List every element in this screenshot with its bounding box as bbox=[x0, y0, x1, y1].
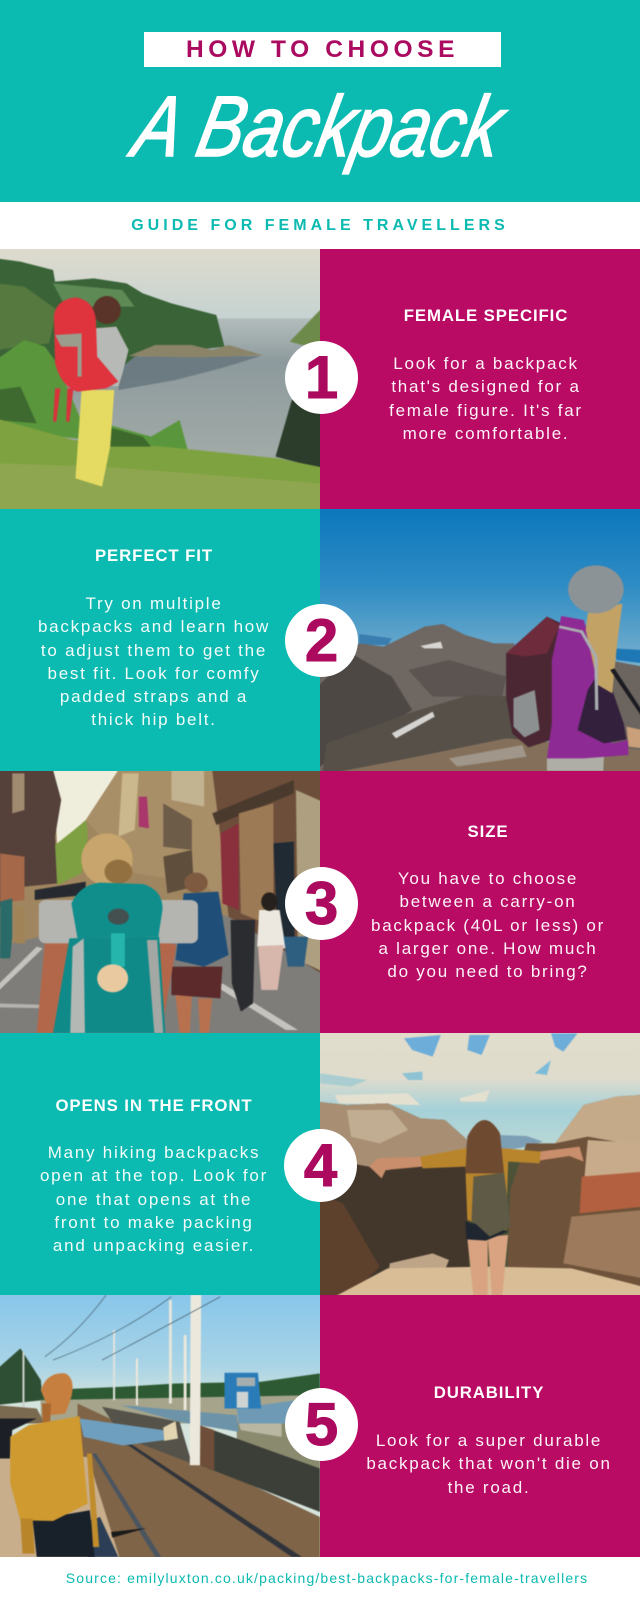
heading 4: OPENS IN THE FRONT bbox=[55, 1096, 253, 1115]
text 2: best fit. Look for comfy bbox=[47, 664, 260, 683]
text 3: between a carry-on bbox=[399, 892, 577, 911]
number badge 2: 2 bbox=[305, 607, 338, 674]
heading 2: PERFECT FIT bbox=[95, 546, 213, 565]
text 1: that's designed for a bbox=[391, 377, 581, 396]
text 2: backpacks and learn how bbox=[38, 617, 270, 636]
text 4: front to make packing bbox=[54, 1213, 254, 1232]
text 2 bbox=[38, 594, 270, 729]
subtitle bbox=[0, 202, 640, 249]
panel 5: durability bbox=[320, 1295, 640, 1557]
number badge 3: 3 bbox=[305, 870, 338, 937]
panel 4: opens in the front bbox=[0, 1033, 320, 1295]
text 1: female figure. It's far bbox=[389, 400, 583, 420]
text 2: padded straps and a bbox=[60, 687, 248, 706]
text 1 bbox=[389, 354, 583, 443]
photo 2: hiker with purple jacket and mountains bbox=[320, 509, 640, 771]
text 3 bbox=[371, 869, 605, 981]
heading 5: DURABILITY bbox=[434, 1383, 544, 1402]
text 1: Look for a backpack bbox=[393, 354, 579, 373]
heading 3: SIZE bbox=[468, 822, 508, 841]
number badge 5 bbox=[285, 1388, 358, 1461]
number badge 1: 1 bbox=[305, 344, 338, 411]
photo 5: hitchhiker beside railway tracks bbox=[0, 1295, 320, 1557]
number badge 4: 4 bbox=[304, 1132, 337, 1199]
text 5: the road. bbox=[448, 1478, 530, 1496]
text 2: Try on multiple bbox=[85, 594, 223, 613]
source line: Source: emilyluxton.co.uk/packing/best-backpacks-for-female-travellers bbox=[66, 1570, 588, 1586]
text 1: more comfortable. bbox=[403, 424, 569, 443]
panel 2: perfect fit bbox=[0, 509, 320, 771]
text 3: backpack (40L or less) or bbox=[371, 916, 605, 934]
text 5: backpack that won't die on bbox=[366, 1454, 612, 1473]
text 3: You have to choose bbox=[398, 869, 578, 888]
text 4: and unpacking easier. bbox=[53, 1236, 255, 1255]
text 4: Many hiking backpacks bbox=[48, 1143, 260, 1162]
hitchhiker figure bbox=[10, 1373, 178, 1557]
text 2: to adjust them to get the bbox=[41, 640, 267, 660]
header band bbox=[0, 0, 640, 202]
number badge 1 bbox=[285, 341, 358, 414]
text 2: thick hip belt. bbox=[91, 710, 217, 729]
text 4: one that opens at the bbox=[56, 1190, 252, 1208]
woman figure bbox=[369, 1120, 584, 1297]
hiker figure bbox=[506, 565, 640, 771]
text 3: do you need to bring? bbox=[387, 962, 589, 981]
panel 3: size bbox=[320, 771, 640, 1033]
number badge 4 bbox=[284, 1129, 357, 1202]
photo 3: backpackers on a city street bbox=[0, 771, 320, 1033]
hiker figure bbox=[53, 296, 129, 487]
photo 1: hiker with red pack above a bay bbox=[0, 249, 320, 509]
label: how to choose bbox=[144, 32, 501, 67]
pedestrians bbox=[0, 873, 308, 1033]
photo 4: woman with raised arms over a canyon bbox=[320, 1033, 640, 1295]
subtitle: GUIDE FOR FEMALE TRAVELLERS bbox=[131, 217, 509, 234]
number badge 3 bbox=[285, 867, 358, 940]
panel 1: female specific bbox=[320, 249, 640, 509]
text 3: a larger one. How much bbox=[378, 939, 597, 958]
text 4 bbox=[40, 1143, 268, 1255]
text 5: Look for a super durable bbox=[376, 1431, 602, 1450]
text 5 bbox=[366, 1431, 612, 1496]
main backpacker bbox=[35, 833, 198, 1033]
script title: A Backpack bbox=[123, 78, 515, 174]
number badge 5: 5 bbox=[305, 1391, 338, 1458]
number badge 2 bbox=[285, 604, 358, 677]
label: how to choose: HOW TO CHOOSE bbox=[186, 36, 459, 63]
text 4: open at the top. Look for bbox=[40, 1166, 268, 1185]
heading 1: FEMALE SPECIFIC bbox=[404, 306, 568, 325]
